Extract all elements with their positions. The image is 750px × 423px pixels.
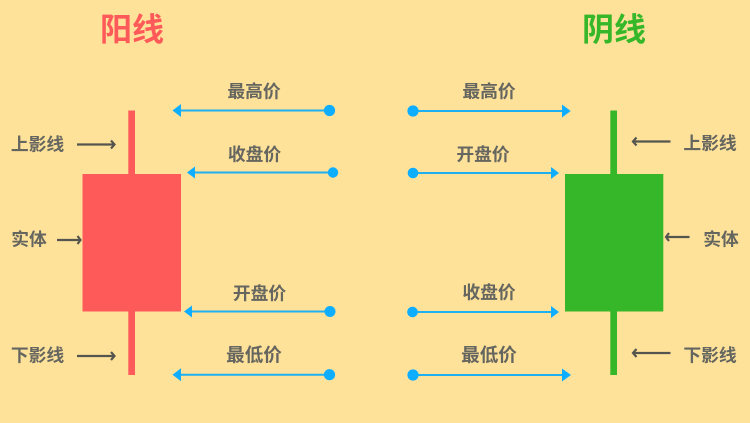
panel: bullish candle (11, 12, 338, 381)
pointer: high price (172, 104, 335, 117)
pointer: low price (407, 368, 571, 382)
label: body: 实体 (11, 228, 47, 250)
label: high price: 最高价 (227, 80, 281, 102)
title: bearish: 阴线 (582, 12, 646, 48)
label: open price: 开盘价 (233, 282, 286, 304)
pointer: close price (407, 306, 559, 318)
label: low price: 最低价 (226, 344, 282, 366)
pointer: open price (184, 306, 336, 318)
pointer: low price (172, 368, 335, 381)
label: high price: 最高价 (462, 80, 516, 102)
arrow: upper shadow (633, 138, 670, 146)
label: lower shadow: 下影线 (683, 346, 737, 366)
label: close price: 收盘价 (228, 144, 281, 164)
label: low price: 最低价 (461, 344, 517, 366)
label: upper shadow: 上影线 (11, 134, 64, 154)
pointer: close price (187, 166, 338, 178)
label: body: 实体 (703, 228, 739, 250)
label: lower shadow: 下影线 (11, 346, 64, 366)
panel: bearish candle (407, 12, 739, 382)
red candlestick (82, 110, 181, 375)
arrow: lower shadow (77, 352, 114, 360)
arrow: body (666, 233, 690, 241)
pointer: open price (408, 167, 559, 179)
pointer: high price (407, 104, 571, 118)
label: open price: 开盘价 (456, 144, 510, 164)
arrow: lower shadow (633, 349, 670, 357)
arrow: body (57, 236, 80, 244)
green candlestick (565, 110, 663, 375)
title: bullish: 阳线 (100, 12, 164, 48)
label: close price: 收盘价 (462, 282, 516, 302)
arrow: upper shadow (77, 140, 114, 148)
label: upper shadow: 上影线 (683, 134, 737, 154)
